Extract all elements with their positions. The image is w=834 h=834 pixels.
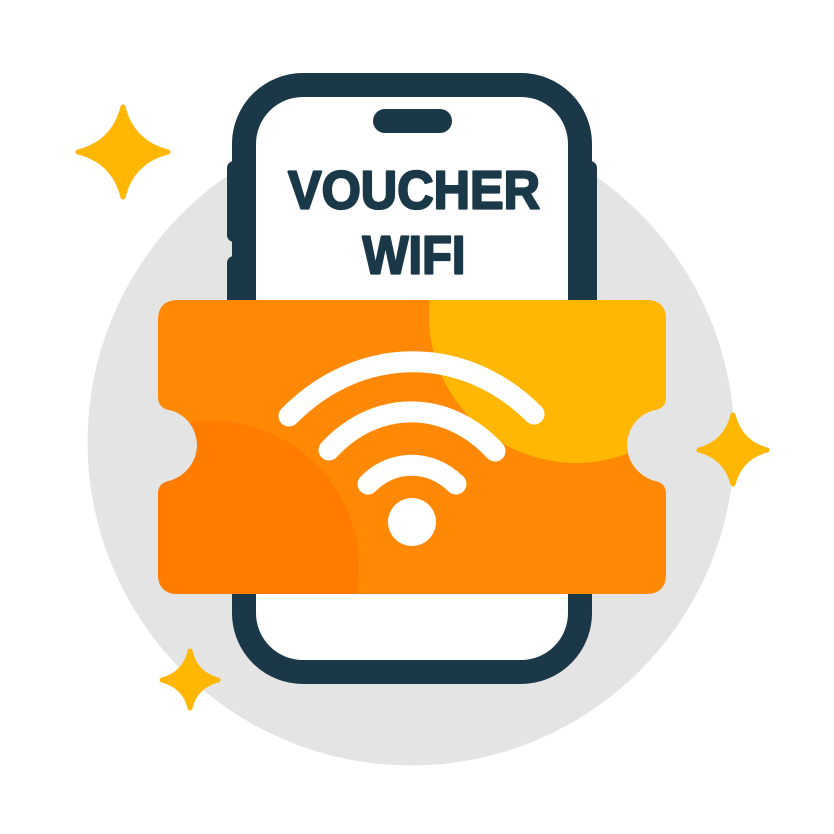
sparkle: right <box>699 415 767 484</box>
ticket yellow circle <box>429 300 666 463</box>
wifi inner arc <box>368 465 456 484</box>
ticket <box>158 300 666 594</box>
ticket dark circle <box>158 421 359 594</box>
phone side buttons <box>227 161 597 316</box>
heading <box>288 160 540 286</box>
voucher wifi illustration <box>76 73 770 766</box>
sparkle: bottom left <box>162 651 218 708</box>
phone notch <box>373 109 452 133</box>
wifi icon <box>289 362 534 546</box>
heading: WIFI <box>362 226 466 286</box>
heading: VOUCHER <box>288 160 540 220</box>
phone <box>227 85 597 672</box>
ticket base <box>150 295 675 600</box>
wifi middle arc <box>329 412 495 451</box>
sparkle: top left <box>78 107 168 197</box>
wifi outer arc <box>289 362 534 416</box>
phone body <box>244 85 580 672</box>
wifi dot <box>388 498 436 546</box>
background circle <box>88 118 734 766</box>
